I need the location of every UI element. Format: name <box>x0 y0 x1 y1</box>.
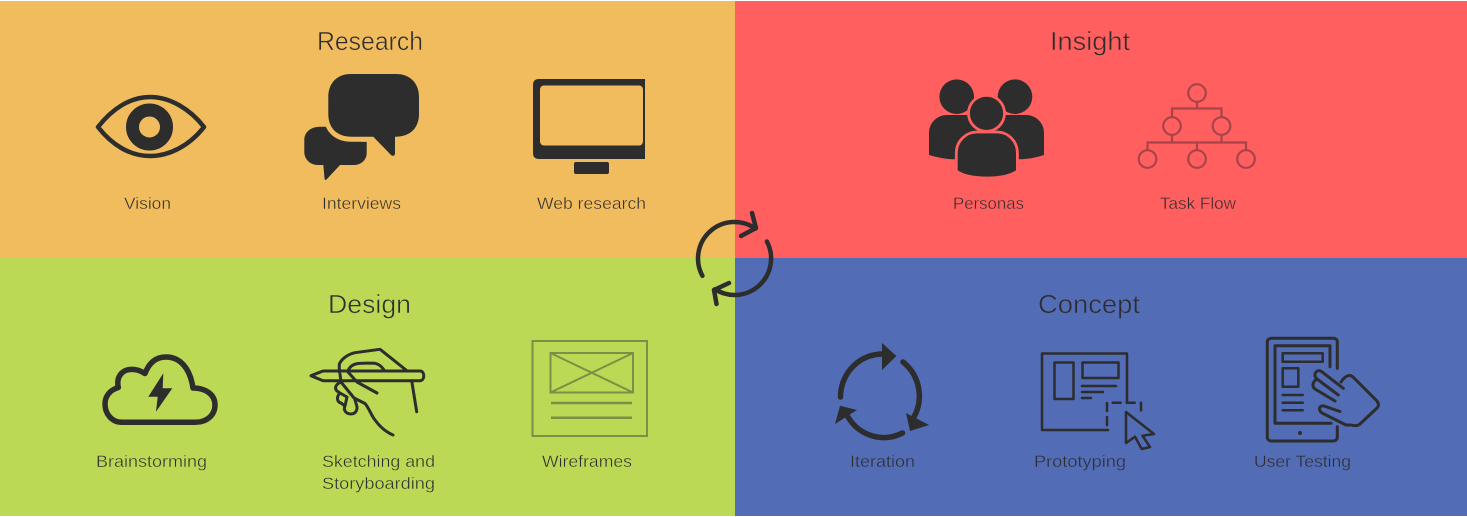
label: web research: Web research <box>537 194 646 213</box>
label: brainstorming: Brainstorming <box>96 452 207 471</box>
icon: vision eye <box>98 97 204 156</box>
label: vision: Vision <box>124 194 171 213</box>
label: sketching and storyboarding: Sketching and <box>322 452 435 471</box>
label: interviews: Interviews <box>322 194 401 213</box>
panel: research <box>0 1 735 258</box>
icon: task flow tree <box>1139 84 1255 168</box>
icon: personas group <box>929 79 1044 178</box>
heading: concept: Concept <box>1038 289 1141 319</box>
label: prototyping: Prototyping <box>1034 452 1126 471</box>
icon: user testing tablet and hand <box>1267 338 1378 441</box>
heading: insight: Insight <box>1050 26 1131 56</box>
label: task flow: Task Flow <box>1160 194 1237 213</box>
icon: iteration arrows <box>835 343 929 438</box>
panel: design <box>0 258 735 516</box>
heading: research: Research <box>317 26 423 56</box>
icon: central cycle arrows <box>698 213 771 304</box>
icon: web research monitor <box>533 79 645 174</box>
panel: insight <box>735 1 1467 258</box>
icon: prototyping cursor <box>1042 354 1154 449</box>
heading: design: Design <box>328 289 411 319</box>
label: iteration: Iteration <box>850 452 915 471</box>
label: sketching and storyboarding <box>322 452 435 493</box>
icon: interviews speech bubbles <box>304 74 419 180</box>
icon: wireframes layout <box>532 341 647 436</box>
panel: concept <box>735 258 1467 516</box>
label: user testing: User Testing <box>1254 452 1351 471</box>
label: sketching and storyboarding: Storyboarding <box>322 474 435 493</box>
label: wireframes: Wireframes <box>542 452 632 471</box>
icon: brainstorming cloud <box>105 357 215 422</box>
icon: sketching hand with pen <box>311 349 424 435</box>
label: personas: Personas <box>953 194 1024 213</box>
